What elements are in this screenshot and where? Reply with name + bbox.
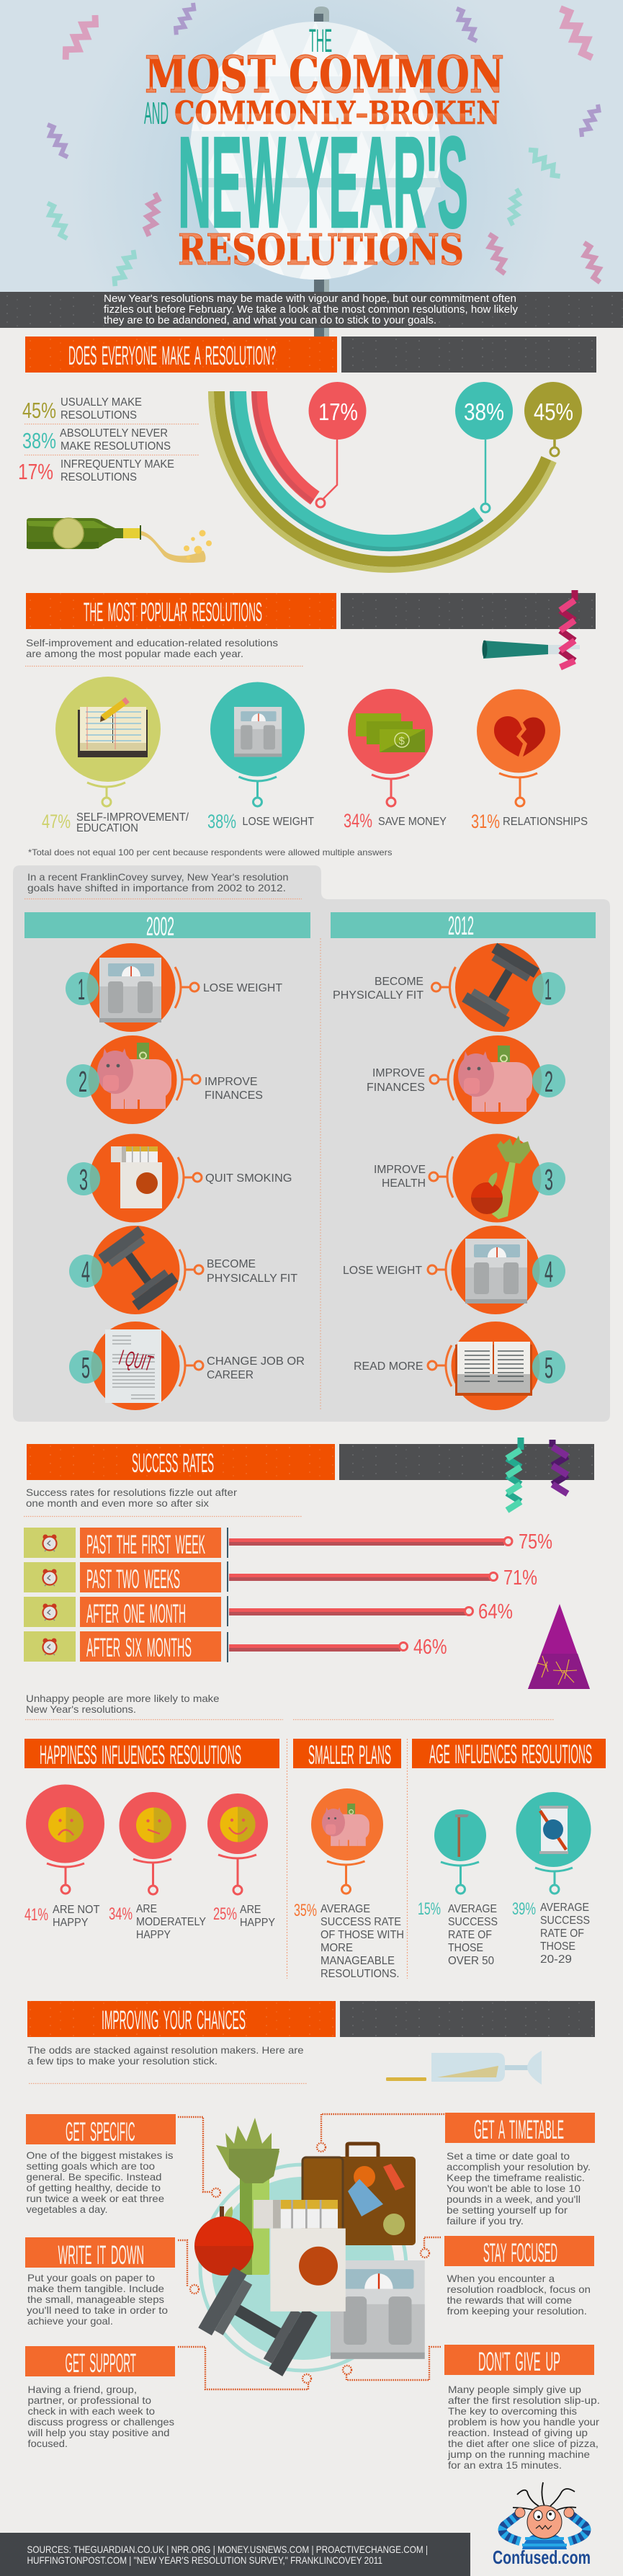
title: RESOLUTIONS — [178, 225, 464, 275]
panel: the most popular resolutions — [25, 590, 596, 857]
intro text: goals have shifted in importance from 2002 to 2012. — [27, 882, 286, 893]
tip: get a timetable: be setting yourself up for — [447, 2204, 568, 2216]
popular resolution labels: 34% — [344, 810, 372, 832]
2002 rank 2: improve finances: FINANCES — [205, 1089, 263, 1102]
2002 rank 4: become physically fit: PHYSICALLY FIT — [207, 1273, 298, 1285]
2012 rank 5: read more: READ MORE — [354, 1360, 423, 1373]
tip: get specific: One of the biggest mistakes is — [26, 2149, 173, 2161]
bar row: past two weeks 71 per cent: PAST TWO WEEKS — [86, 1564, 180, 1594]
popular resolution labels: LOSE WEIGHT — [242, 816, 314, 828]
tip: get a timetable: You won't be able to lose 10 — [447, 2183, 581, 2194]
year heading 2012 — [331, 911, 596, 940]
section heading: DOES EVERYONE MAKE A RESOLUTION? — [68, 341, 276, 370]
panel: success rates — [24, 1438, 594, 1719]
age labels 20-29: 20-29 — [540, 1953, 572, 1966]
balloon: happy: ARE — [240, 1904, 261, 1916]
tip: stay focused — [444, 2236, 594, 2317]
popular resolution labels: RELATIONSHIPS — [503, 816, 588, 828]
icon: weighing scale balloon 38 per cent — [210, 682, 305, 806]
tip: don't give up: after the first resolution slip-up. — [448, 2394, 600, 2406]
age labels 20-29: AVERAGE — [540, 1902, 589, 1914]
smaller plans label: 35% — [294, 1901, 317, 1920]
tip: write it down: WRITE IT DOWN — [58, 2240, 144, 2270]
2012 rank 2: improve finances: FINANCES — [367, 1082, 425, 1094]
tip: don't give up: jump on the running machine — [447, 2448, 590, 2460]
tip: don't give up — [444, 2345, 600, 2471]
year heading 2002: 2002 — [146, 912, 174, 941]
intro text: Success rates for resolutions fizzle out after — [26, 1487, 237, 1498]
sources footer: SOURCES: THEGUARDIAN.CO.UK | NPR.ORG | MONEY.USNEWS.COM | PROACTIVECHANGE.COM | — [27, 2544, 428, 2555]
balloon: moderately happy: ARE — [136, 1903, 157, 1915]
intro text — [24, 871, 302, 899]
popular resolution labels: 47% — [42, 811, 71, 832]
section heading: SUCCESS RATES — [132, 1448, 214, 1478]
2002 rank 1: lose weight: 1 — [78, 973, 85, 1006]
2002 rank 1: lose weight: LOSE WEIGHT — [203, 982, 283, 994]
tip: write it down — [25, 2237, 175, 2327]
tip: don't give up: Many people simply give up — [448, 2384, 581, 2395]
year heading 2012: 2012 — [448, 911, 474, 940]
panel: age influences resolutions — [412, 1739, 606, 1967]
balloon: piggy bank — [311, 1788, 383, 1894]
section heading — [24, 1739, 279, 1770]
tip: don't give up: The key to overcoming this — [448, 2405, 577, 2417]
2012 rank 2: improve finances — [367, 1035, 565, 1124]
intro band: New Year's resolutions may be made with vigour and hope, but our commitment often — [104, 293, 516, 305]
section heading — [27, 1444, 594, 1480]
arc: 45 per cent — [211, 382, 582, 570]
tip: get a timetable: Keep the timeframe realistic. — [447, 2172, 585, 2183]
balloon: moderately happy: 34% — [109, 1904, 133, 1924]
bar row: past the first week 75 per cent — [24, 1528, 552, 1559]
legend: 45% — [22, 398, 56, 423]
arc chart — [211, 382, 582, 570]
smaller plans label: OF THOSE WITH — [321, 1929, 404, 1941]
icon: suitcase — [302, 2144, 416, 2245]
intro text — [27, 2044, 307, 2084]
intro band: they are to be adandoned, and what you can do to stick to your goals. — [104, 315, 436, 326]
arc: 45 per cent: 45% — [534, 398, 573, 425]
section heading — [293, 1739, 401, 1770]
bar row: after six months 46 per cent: 46% — [413, 1636, 447, 1659]
balloon: can — [516, 1792, 591, 1894]
intro text — [24, 1487, 302, 1516]
note: unhappy people: Unhappy people are more likely to make — [26, 1693, 220, 1704]
intro text: In a recent FranklinCovey survey, New Year's resolution — [27, 871, 288, 883]
connector lines — [178, 2114, 444, 2389]
year heading 2002 — [24, 912, 310, 941]
2002 rank 1: lose weight — [66, 943, 283, 1032]
balloon: moderately happy: MODERATELY — [136, 1916, 206, 1928]
2012 rank 4: lose weight: 4 — [544, 1255, 553, 1288]
popular resolution labels: SELF-IMPROVEMENT/ — [76, 811, 189, 824]
tip: write it down: achieve your goal. — [27, 2315, 113, 2327]
icon: champagne bottle — [27, 518, 212, 563]
tip: get support: GET SUPPORT — [65, 2348, 136, 2378]
tip: get a timetable — [445, 2113, 595, 2227]
text: HAPPINESS INFLUENCES RESOLUTIONS — [40, 1740, 241, 1770]
tip: get support: Having a friend, group, — [27, 2384, 137, 2395]
bar row: after six months 46 per cent — [24, 1631, 447, 1662]
smaller plans label: MANAGEABLE — [321, 1955, 395, 1967]
intro text: are among the most popular made each year. — [26, 648, 243, 659]
tip: stay focused: the rewards that will come — [447, 2294, 572, 2306]
balloon: not happy: 41% — [24, 1905, 48, 1925]
balloon: not happy: ARE NOT — [53, 1904, 100, 1916]
tip: don't give up: the diet after one slice of pizza, — [448, 2438, 599, 2449]
footnote: *Total does not equal 100 per cent because respondents were allowed multiple answers — [28, 847, 392, 857]
intro band — [0, 292, 623, 328]
tip: get specific — [26, 2114, 176, 2215]
bar row: past the first week 75 per cent: 75% — [519, 1530, 552, 1554]
popular resolution labels: EDUCATION — [76, 822, 138, 834]
age labels 20-29: THOSE — [540, 1940, 575, 1953]
tip: get a timetable: Set a time or date goal to — [447, 2150, 570, 2162]
2002 rank 5: change job or career: 5 — [81, 1351, 90, 1384]
age labels 20-29 — [512, 1899, 590, 1966]
2002 rank 4: become physically fit — [69, 1226, 298, 1314]
balloon: walking cane — [434, 1809, 486, 1894]
legend: RESOLUTIONS — [60, 409, 137, 422]
tip: stay focused: from keeping your resolution. — [447, 2305, 587, 2317]
2012 rank 1: become physically fit: 1 — [544, 973, 552, 1006]
tip: don't give up: for an extra 15 minutes. — [448, 2459, 562, 2471]
confetti streamers — [44, 1, 604, 288]
bar row: past two weeks 71 per cent — [24, 1561, 537, 1594]
mascot — [503, 2482, 586, 2549]
2002 rank 4: become physically fit: BECOME — [207, 1258, 256, 1270]
bar row: after six months 46 per cent: AFTER SIX MONTHS — [86, 1633, 192, 1662]
intro band: fizzles out before February. We take a look at the most common resolutions, how likely — [104, 304, 519, 316]
age labels over 50: THOSE — [448, 1942, 483, 1954]
balloon: not happy — [24, 1784, 104, 1929]
title: AND — [144, 96, 169, 131]
age labels 20-29: 39% — [512, 1899, 536, 1919]
intro text: Self-improvement and education-related resolutions — [26, 637, 278, 649]
tip: get specific: of getting healthy, decide to — [26, 2182, 161, 2193]
legend — [18, 396, 199, 484]
legend: MAKE RESOLUTIONS — [60, 440, 171, 453]
text: SMALLER PLANS — [308, 1740, 391, 1770]
panel: smaller plans — [293, 1739, 404, 1980]
2002 rank 2: improve finances — [66, 1035, 263, 1124]
age labels over 50: AVERAGE — [448, 1903, 497, 1915]
popular resolution labels — [42, 810, 588, 834]
2012 rank 5: read more — [354, 1322, 565, 1410]
panel: 2002 versus 2012 survey — [13, 865, 610, 1422]
tip: get specific: run twice a week or eat three — [26, 2193, 164, 2204]
popular resolution labels: SAVE MONEY — [378, 816, 447, 828]
icon: celery — [216, 2118, 279, 2275]
2012 rank 1: become physically fit — [333, 943, 565, 1032]
age labels over 50: RATE OF — [448, 1929, 492, 1941]
tip: write it down: Put your goals on paper to — [27, 2272, 155, 2283]
2012 rank 4: lose weight: LOSE WEIGHT — [343, 1265, 423, 1277]
bar row: after one month 64 per cent — [24, 1596, 513, 1628]
smaller plans label: MORE — [321, 1942, 353, 1954]
tip: stay focused: When you encounter a — [447, 2273, 555, 2284]
arc: 17 per cent — [254, 382, 366, 507]
legend: RESOLUTIONS — [60, 471, 137, 483]
section heading — [27, 2001, 595, 2037]
legend: USUALLY MAKE — [60, 396, 142, 409]
tip: get specific: vegetables a day. — [26, 2203, 108, 2215]
icon: party blower — [483, 590, 580, 667]
icon: apple — [194, 2206, 254, 2276]
icon: teal streamer — [507, 1438, 521, 1510]
arc: 38 per cent: 38% — [464, 398, 504, 425]
tip: get a timetable: failure if you try. — [447, 2215, 524, 2227]
2012 rank 3: improve health: HEALTH — [382, 1177, 426, 1190]
note: unhappy people: New Year's resolutions. — [26, 1703, 136, 1715]
tip: get support: will help you stay positive and — [27, 2427, 170, 2438]
title: THE — [309, 22, 332, 59]
tip: stay focused: resolution roadblock, focus on — [447, 2283, 591, 2295]
tip: get support — [25, 2346, 175, 2449]
title: MOST COMMON — [145, 45, 504, 104]
glitter ball — [190, 6, 441, 292]
balloon: happy: 25% — [213, 1904, 237, 1924]
tip: write it down: the small, manageable steps — [27, 2294, 164, 2305]
tip: get a timetable: accomplish your resolution by. — [447, 2161, 591, 2172]
section heading: IMPROVING YOUR CHANCES — [102, 2005, 246, 2035]
popular resolution labels: 38% — [207, 811, 236, 832]
panel: does everyone make a resolution — [18, 328, 596, 570]
2002 rank 3: quit smoking — [67, 1134, 292, 1222]
intro text: one month and even more so after six — [26, 1497, 209, 1509]
balloon: happy: HAPPY — [240, 1917, 275, 1929]
central illustration: collection of resolution objects — [194, 2118, 425, 2376]
age labels over 50: 15% — [418, 1899, 441, 1919]
smaller plans label: SUCCESS RATE — [321, 1916, 401, 1928]
age labels over 50: OVER 50 — [448, 1955, 494, 1967]
smaller plans label: AVERAGE — [321, 1903, 370, 1915]
icon: large scale — [331, 2260, 425, 2359]
icon: large dumbbell — [198, 2267, 318, 2376]
icon: book balloon 47 per cent — [55, 677, 161, 806]
2002 rank 5: change job or career: CHANGE JOB OR — [207, 1355, 305, 1368]
2002 rank 4: become physically fit: 4 — [81, 1255, 90, 1288]
legend: INFREQUENTLY MAKE — [60, 458, 174, 471]
wordmark: Confused.com — [493, 2546, 591, 2568]
2002 rank 3: quit smoking: QUIT SMOKING — [205, 1172, 292, 1185]
tip: don't give up: reaction. Instead of giving up — [448, 2427, 588, 2438]
legend: 38% — [22, 428, 56, 453]
sources footer: HUFFINGTONPOST.COM | "NEW YEAR'S RESOLUTION SURVEY," FRANKLINCOVEY 2011 — [27, 2554, 382, 2566]
title: COMMONLY–BROKEN — [174, 95, 500, 132]
2012 rank 1: become physically fit: BECOME — [375, 976, 423, 988]
panel: happiness influences resolutions — [24, 1739, 279, 1941]
legend: ABSOLUTELY NEVER — [60, 427, 168, 440]
tip: get specific: general. Be specific. Instead — [26, 2171, 162, 2183]
age labels 20-29: RATE OF — [540, 1927, 584, 1940]
balloon: moderately happy — [109, 1792, 206, 1941]
intro text: The odds are stacked against resolution makers. Here are — [27, 2044, 304, 2056]
balloon: not happy: HAPPY — [53, 1917, 88, 1929]
2002 rank 5: change job or career: I QUIT — [117, 1346, 156, 1376]
tip: get a timetable: pounds in a week, and you'll — [447, 2193, 581, 2205]
tip: get support: focused. — [27, 2438, 68, 2449]
age labels over 50: SUCCESS — [448, 1916, 498, 1928]
panel: improving your chances — [25, 2001, 600, 2471]
icon: party hat — [528, 1604, 590, 1689]
tip: get specific: GET SPECIFIC — [66, 2117, 135, 2147]
smaller plans label: RESOLUTIONS. — [321, 1968, 399, 1980]
icon: money balloon 34 per cent: $ — [399, 735, 405, 747]
bar row: after one month 64 per cent: AFTER ONE MONTH — [86, 1599, 186, 1628]
2012 rank 3: improve health: IMPROVE — [374, 1164, 426, 1176]
2012 rank 2: improve finances: 2 — [544, 1065, 553, 1098]
2012 rank 1: become physically fit: PHYSICALLY FIT — [333, 989, 424, 1002]
icon: spilled wine glass — [386, 2051, 542, 2085]
2012 rank 5: read more: 5 — [544, 1351, 553, 1384]
header panel: sky background with title — [0, 0, 623, 328]
note: unhappy people — [25, 1693, 554, 1719]
2012 rank 3: improve health — [374, 1134, 565, 1222]
tip: get specific: setting goals which are too — [26, 2160, 155, 2172]
icon: cigarette pack — [254, 2200, 346, 2312]
arc: 38 per cent — [232, 382, 513, 549]
icon: money balloon 34 per cent — [348, 689, 433, 806]
legend: 17% — [18, 459, 53, 484]
2002 rank 3: quit smoking: 3 — [79, 1163, 88, 1196]
2002 rank 5: change job or career — [69, 1322, 305, 1410]
2002 rank 2: improve finances: IMPROVE — [205, 1076, 258, 1088]
age labels 20-29: SUCCESS — [540, 1915, 590, 1927]
intro text — [25, 637, 303, 666]
arc: 17 per cent: 17% — [318, 398, 358, 425]
tip: write it down: make them tangible. Include — [27, 2283, 164, 2294]
sources footer — [0, 2533, 470, 2576]
icon: broken heart balloon 31 per cent — [477, 689, 560, 806]
tip: get support: partner, or professional to — [27, 2394, 151, 2406]
popular resolution labels: 31% — [471, 811, 500, 832]
2002 rank 2: improve finances: 2 — [79, 1065, 87, 1098]
section heading — [26, 593, 596, 629]
age labels over 50 — [418, 1899, 498, 1967]
icon: purple streamer — [552, 1440, 568, 1494]
tip: write it down: you'll need to take in order to — [27, 2304, 168, 2316]
tip: don't give up: problem is how you handle your — [448, 2416, 599, 2428]
smaller plans label — [294, 1901, 404, 1980]
balloon: moderately happy: HAPPY — [136, 1929, 171, 1941]
bar row: past the first week 75 per cent: PAST THE FIRST WEEK — [86, 1530, 205, 1559]
tip: get support: discuss progress or challenges — [27, 2416, 174, 2428]
bar row: after one month 64 per cent: 64% — [478, 1600, 513, 1623]
section heading: THE MOST POPULAR RESOLUTIONS — [84, 597, 262, 627]
logo: Confused.com mascot and wordmark — [493, 2482, 591, 2568]
2012 rank 3: improve health: 3 — [544, 1163, 553, 1196]
title — [144, 22, 504, 275]
2012 rank 2: improve finances: IMPROVE — [372, 1067, 425, 1079]
2002 rank 5: change job or career: CAREER — [207, 1369, 254, 1381]
bar row: past two weeks 71 per cent: 71% — [503, 1566, 537, 1590]
intro text: a few tips to make your resolution stick. — [27, 2055, 218, 2067]
balloon: happy — [207, 1793, 275, 1929]
2012 rank 4: lose weight — [343, 1226, 565, 1314]
tip: get support: check in with each week to — [27, 2405, 155, 2417]
